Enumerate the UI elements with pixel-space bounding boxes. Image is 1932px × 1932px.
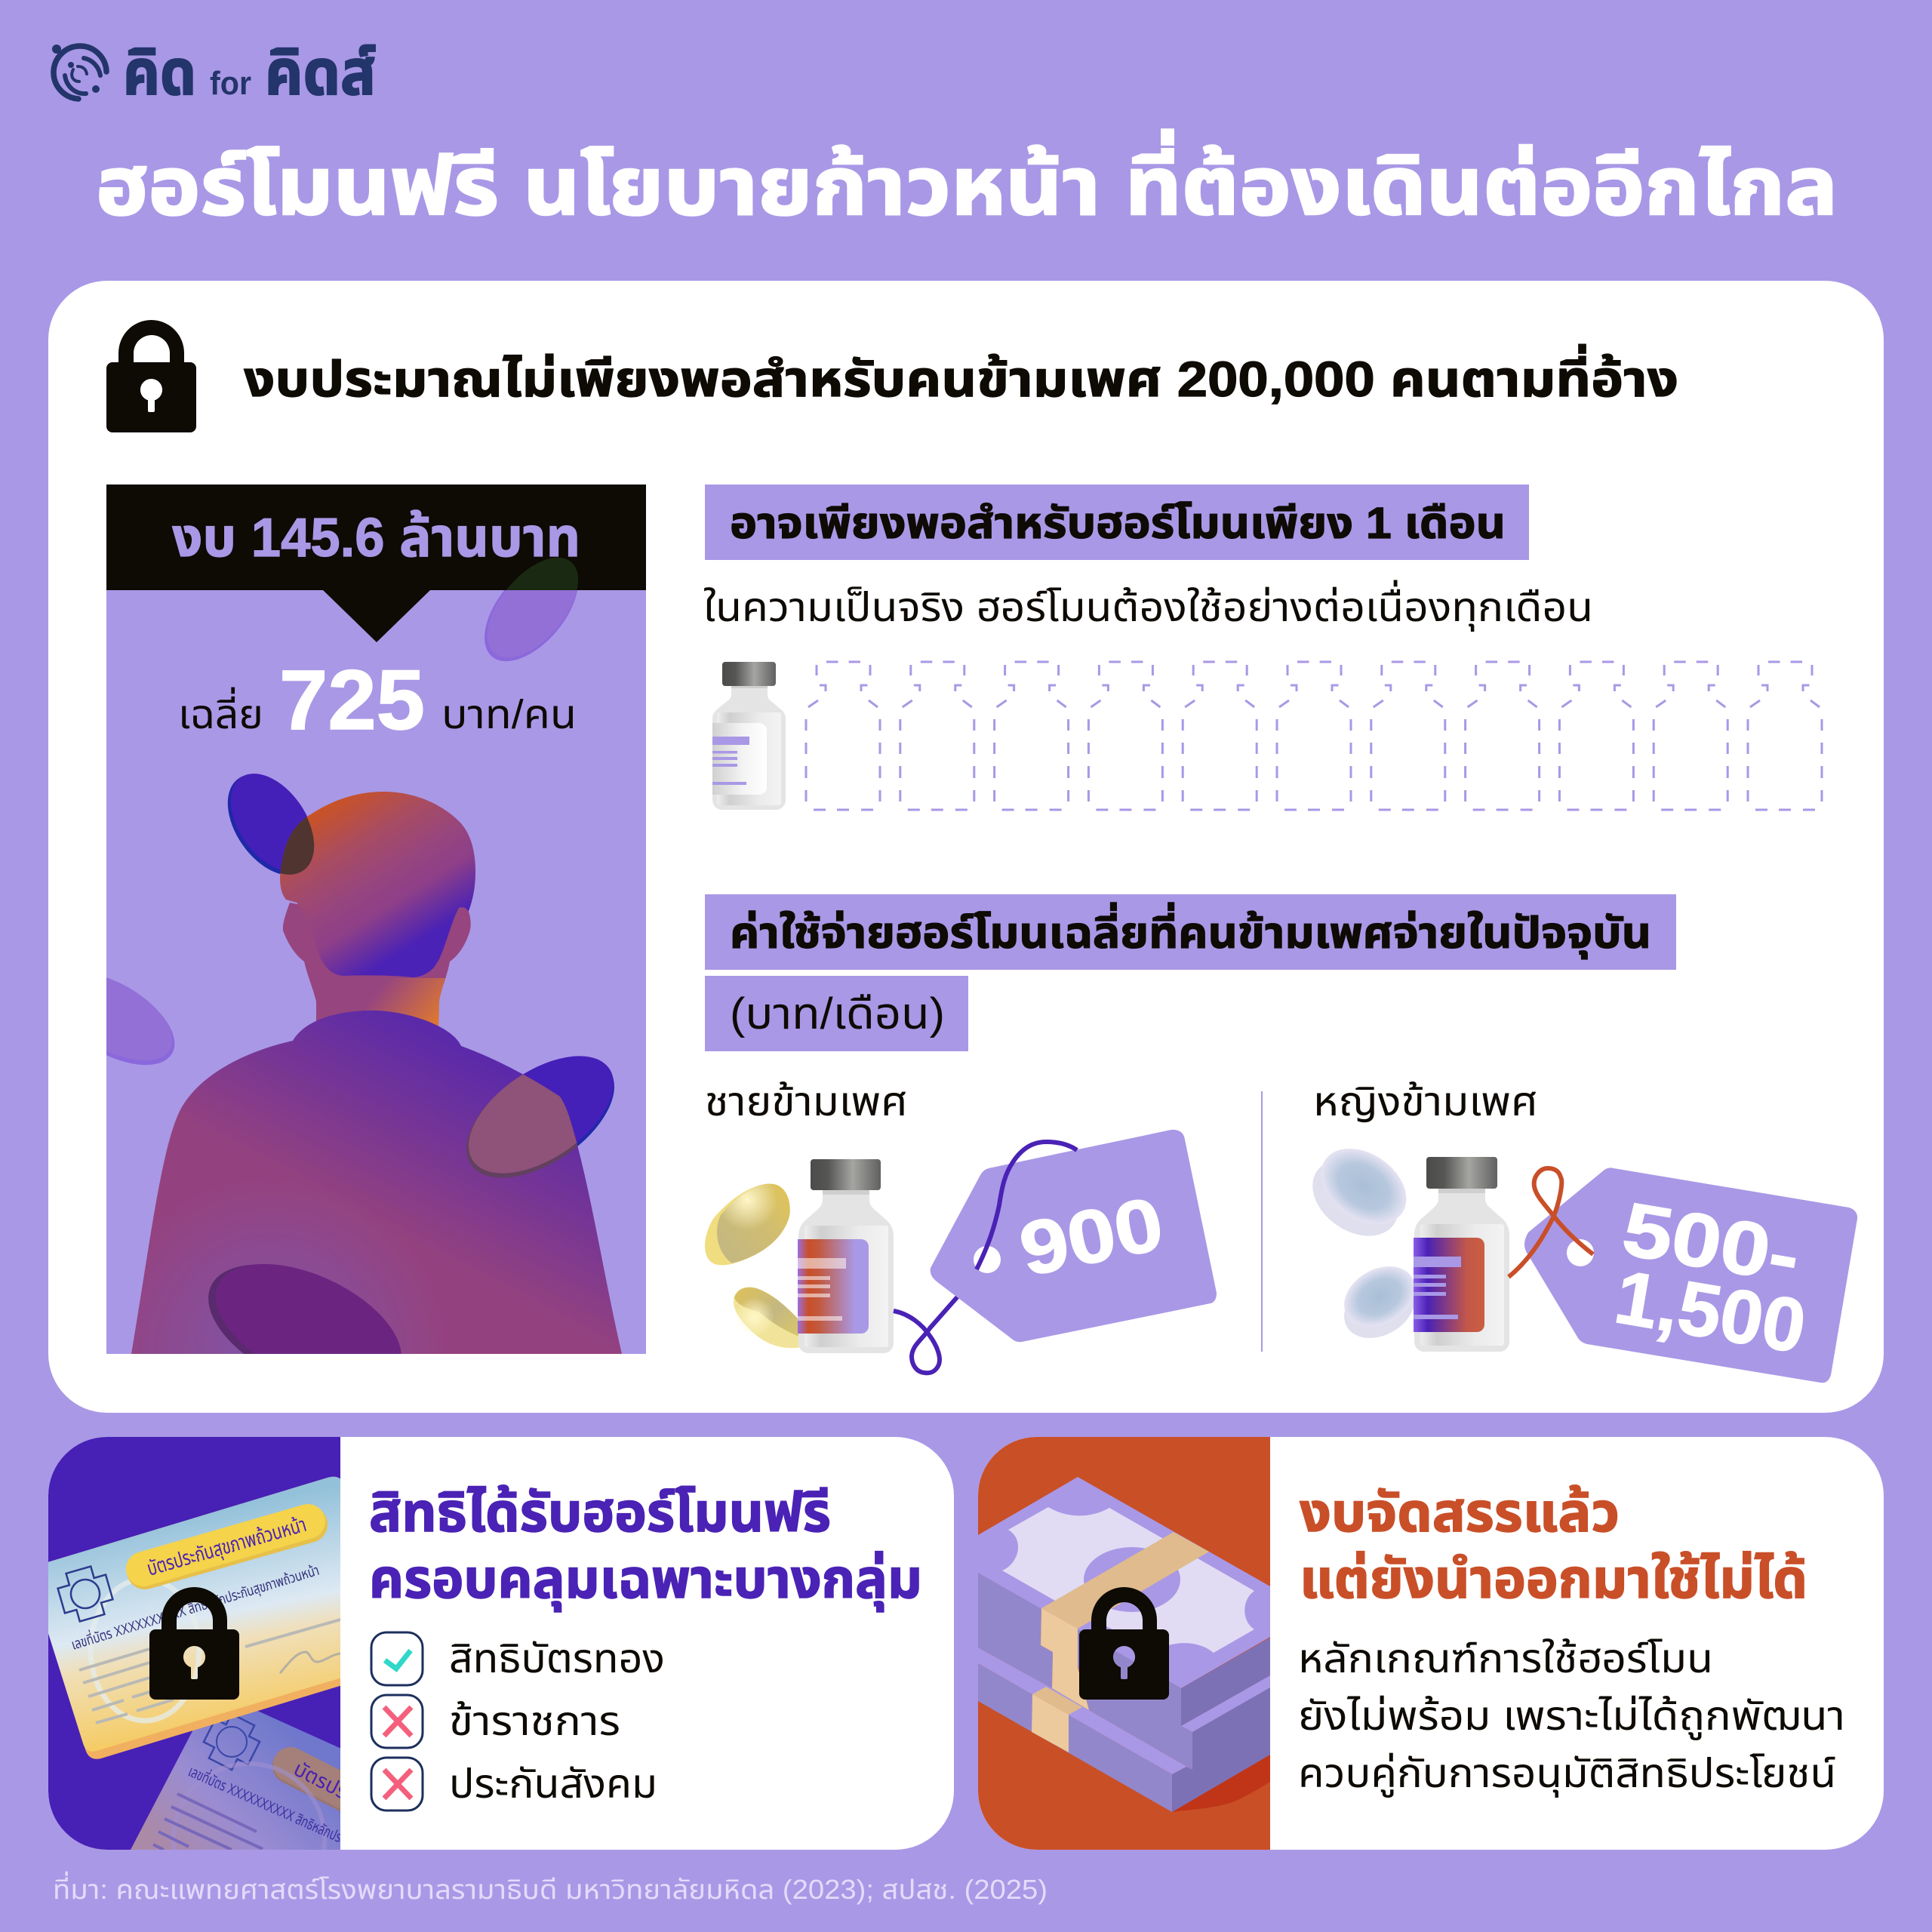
- list item: civil servants, not covered: ข้าราชการ: [449, 1699, 620, 1744]
- list item: social security, not covered: [371, 1758, 657, 1810]
- icon: price tag 500-1,500: [1509, 1168, 1857, 1383]
- label: current average hormone cost: [705, 894, 1676, 970]
- heading: covers only some groups: ครอบคลุมเฉพาะบางกลุ่ม: [369, 1549, 922, 1612]
- list item: social security, not covered: ประกันสังคม: [449, 1761, 657, 1807]
- list item: gold card, covered: [371, 1632, 665, 1685]
- label: current average hormone cost: ค่าใช้จ่ายฮอร์โมนเฉลี่ยที่คนข้ามเพศจ่ายในปัจจุบัน: [730, 902, 1651, 959]
- text: average 725 baht per person: เฉลี่ย: [178, 687, 263, 737]
- label: enough for only one month: อาจเพียงพอสำหรับฮอร์โมนเพียง 1 เดือน: [730, 499, 1506, 548]
- logo wordmark: [123, 37, 376, 108]
- text: average 725 baht per person: บาท/คน: [441, 692, 577, 737]
- group: trans women price illustration: [1298, 1133, 1857, 1383]
- illustration: coin overlaps on man: [189, 758, 635, 1420]
- text: 500-: 500-: [1617, 1186, 1806, 1299]
- heading: still cannot be used: แต่ยังนำออกมาใช้ไม่ได้: [1300, 1549, 1807, 1610]
- text: average 725 baht per person: [178, 653, 577, 747]
- card cross emblem: [57, 1565, 114, 1623]
- icon: blue pills: [1298, 1133, 1426, 1350]
- label: enough for only one month: [705, 485, 1529, 560]
- first card: [38, 1477, 355, 1759]
- heading: budget insufficient: งบประมาณไม่เพียงพอสำหรับคนข้ามเพศ 200,000 คนตามที่อ้าง: [244, 344, 1678, 407]
- illustration: locked health cards: [48, 1437, 340, 1850]
- coin over black band: [506, 557, 578, 590]
- second card: เลขที่บัตร XXXXXXXXXX สิทธิหลักประ: [186, 1761, 349, 1847]
- icon: yellow capsules: [705, 1183, 800, 1348]
- text: 900 baht: 900: [1013, 1181, 1171, 1293]
- text block: explanation: ยังไม่พร้อม เพราะไม่ได้ถูกพัฒนา: [1298, 1694, 1845, 1740]
- second card: [131, 1711, 340, 1850]
- panel: main budget: [37, 281, 1884, 1420]
- text block: explanation: หลักเกณฑ์การใช้ฮอร์โมน: [1298, 1636, 1713, 1681]
- logo wordmark: คิด: [123, 37, 196, 108]
- panel: allocated budget unusable: [978, 1437, 1884, 1850]
- divider: [1261, 1091, 1263, 1352]
- card number text: เลขที่บัตร XXXXXXXXXX สิทธิหลักประกันสุขภาพถ้วนหน้า: [69, 1560, 321, 1654]
- heading: budget allocated: งบจัดสรรแล้ว: [1300, 1483, 1620, 1543]
- panel: coverage rights: [48, 1437, 954, 1850]
- icons: eleven empty dashed vials: [806, 662, 1822, 810]
- icon: lock: [106, 320, 196, 432]
- icon: lock: [149, 1587, 239, 1700]
- text: 1,500: 1,500: [1609, 1254, 1811, 1369]
- list item: gold card, covered: สิทธิบัตรทอง: [449, 1636, 665, 1681]
- panel: budget per person illustration: [106, 485, 646, 1354]
- logo wordmark: คิดส์: [265, 37, 376, 108]
- icon: vial with red label: [798, 1159, 894, 1353]
- icon: vial with purple-orange label: [1414, 1157, 1509, 1352]
- icon: price tag 900: [894, 1130, 1217, 1373]
- label: baht per month: (บาท/เดือน): [730, 989, 945, 1038]
- logo: คิด for คิดส์: [52, 37, 376, 108]
- text block: explanation: ควบคู่กับการอนุมัติสิทธิประโยชน์: [1298, 1751, 1836, 1798]
- icon: logo mark: [52, 45, 106, 99]
- text: budget 145.6 million baht: งบ 145.6 ล้านบาท: [172, 508, 580, 568]
- icon: lock: [1079, 1587, 1169, 1700]
- illustration: man from behind: [98, 792, 622, 1358]
- label: baht per month: [705, 976, 968, 1051]
- band: budget 145.6 million: [106, 485, 646, 642]
- group: trans men price illustration: [702, 1130, 1217, 1373]
- title: ฮอร์โมนฟรี นโยบายก้าวหน้า ที่ต้องเดินต่ออีกไกล: [96, 130, 1838, 232]
- heading: free hormone rights: สิทธิได้รับฮอร์โมนฟรี: [369, 1483, 831, 1543]
- source note: ที่มา: คณะแพทยศาสตร์โรงพยาบาลรามาธิบดี มหาวิทยาลัยมหิดล (2023); สปสช. (2025): [53, 1871, 1048, 1905]
- text: trans women: หญิงข้ามเพศ: [1313, 1079, 1538, 1124]
- text block: explanation: [1298, 1636, 1845, 1798]
- text: average 725 baht per person: 725: [279, 653, 425, 747]
- text: must be used continuously: ในความเป็นจริง ฮอร์โมนต้องใช้อย่างต่อเนื่องทุกเดือน: [703, 580, 1593, 632]
- illustration: locked money stack: [978, 1437, 1270, 1850]
- text: trans men: ชายข้ามเพศ: [705, 1079, 908, 1124]
- icon: vial filled: [712, 662, 786, 810]
- logo wordmark: for: [210, 65, 251, 102]
- list item: civil servants, not covered: [371, 1695, 620, 1748]
- second card: บัตรประกัน: [290, 1758, 380, 1818]
- illustration: floating coins behind: [37, 541, 635, 1202]
- card title text: บัตรประกันสุขภาพถ้วนหน้า: [144, 1513, 309, 1581]
